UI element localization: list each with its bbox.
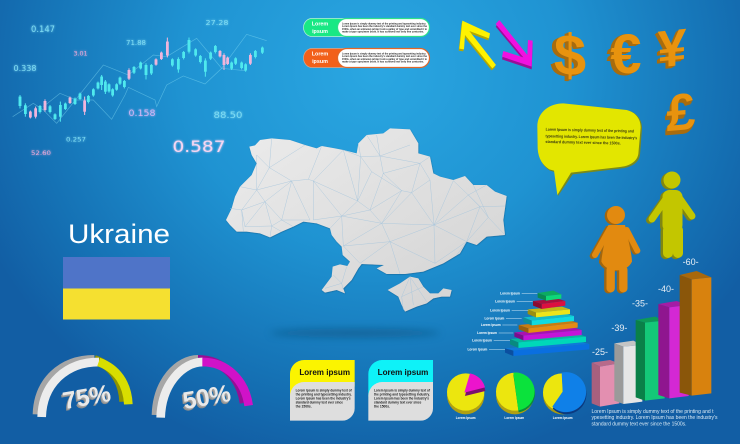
green pill: make a type specimen book. It has survived not only five centuries.: [342, 30, 424, 34]
bar chart caption: standard dummy text ever since the 1500s.: [592, 422, 686, 428]
value 0.147: 0.147: [31, 25, 55, 35]
pyramid chart: [468, 291, 589, 356]
bar value labels: -39-: [611, 323, 627, 333]
value 27.28: 27.28: [206, 19, 228, 27]
orange pill: 1500s, when an unknown printer took a galley of type and scrambled it to: [342, 57, 427, 61]
value 0.158: 0.158: [128, 109, 156, 119]
map shadow: [270, 328, 440, 338]
green pill: Lorem Ipsum is simply dummy text of the printing and typesetting industry.: [342, 22, 426, 26]
gauge 50 percent: [156, 359, 249, 418]
speech bubble: [537, 103, 642, 196]
pink candles: [30, 38, 250, 118]
gauge value 75%: 75%: [61, 380, 113, 415]
value 88.50: 88.50: [214, 111, 242, 121]
pyramid labels: Lorem Ipsum: [490, 308, 510, 312]
text card: yellow: Lorem Ipsum has been the industry's: [296, 397, 351, 401]
pyramid labels: Lorem Ipsum: [500, 291, 520, 295]
bubble text: typesetting industry. Lorem Ipsum has been the industry's: [545, 133, 638, 140]
pyramid labels: Lorem Ipsum: [495, 300, 515, 304]
orange pill: Lorem Ipsum has been the industry's standard dummy text ever since the: [342, 54, 427, 58]
bubble face: [537, 103, 641, 195]
map landmass: [226, 128, 507, 312]
pie 1: Lorem Ipsum: [456, 416, 476, 420]
cyan candles: [20, 38, 262, 122]
gauge value 50%: 50%: [181, 380, 233, 415]
map triangulation mesh: [230, 135, 505, 310]
bar chart caption: Lorem Ipsum is simply dummy text of the printing and t: [592, 409, 714, 415]
text card: cyan: Lorem Ipsum is simply dummy text of: [374, 389, 431, 393]
orange pill: ipsum: [312, 59, 328, 65]
orange pill: Lorem Ipsum is simply dummy text of the printing and typesetting industry.: [342, 52, 426, 56]
pyramid layer: yellow: [528, 307, 570, 317]
arrows: [459, 20, 533, 70]
orange pill: [304, 48, 430, 68]
icon: euro sign: €: [610, 22, 642, 85]
pyramid labels: [468, 291, 537, 351]
bar 35: [636, 317, 665, 401]
pyramid layer: teal: [510, 334, 586, 348]
bar value labels: -35-: [632, 299, 648, 309]
bar chart caption: ypesetting industry. Lorem Ipsum has been the industry's: [592, 415, 718, 421]
value 0.338: 0.338: [14, 64, 37, 73]
pie 2: Lorem Ipsum: [504, 416, 524, 420]
pyramid labels: Lorem Ipsum: [472, 339, 492, 343]
value 0.587: 0.587: [172, 137, 226, 156]
magenta arrow: [496, 20, 533, 69]
pyramid labels: Lorem Ipsum: [481, 323, 501, 327]
green pill: 1500s, when an unknown printer took a galley of type and scrambled it to: [342, 27, 427, 31]
bar 40: [658, 301, 689, 398]
bar value labels: -60-: [683, 257, 699, 267]
value 71.88: 71.88: [126, 39, 146, 47]
icon: dollar sign: $: [554, 22, 586, 89]
pyramid layer: cyan: [523, 314, 574, 325]
icon: pound sign: £: [667, 83, 695, 143]
bubble shadow: [539, 104, 642, 196]
text card: yellow: Lorem ipsum: [299, 368, 350, 377]
gauge 75 percent: [37, 359, 128, 417]
text card: yellow: standard dummy text ever since: [296, 401, 343, 405]
text card: yellow: Lorem Ipsum is simply dummy text of: [296, 389, 353, 393]
text card: yellow: [290, 360, 355, 421]
pyramid layer: orange: [519, 320, 578, 333]
map of Ukraine: [226, 128, 507, 312]
value 52.60: 52.60: [31, 149, 51, 157]
bar 25: [592, 360, 619, 407]
text card: cyan: the 1500s.: [374, 405, 390, 409]
text card: cyan: the printing and typesetting industry.: [374, 393, 430, 397]
pyramid labels: Lorem Ipsum: [468, 347, 488, 351]
text card: yellow: the printing and typesetting industry.: [296, 393, 352, 397]
bar chart caption: [592, 409, 718, 428]
legend pills: [304, 18, 430, 68]
pyramid layer: blue: [505, 342, 589, 356]
flag: [63, 257, 170, 320]
bar value labels: [592, 257, 699, 357]
pyramid labels: Lorem Ipsum: [485, 316, 505, 320]
green pill: Lorem: [312, 22, 328, 28]
chart trend lines: [13, 34, 267, 123]
pyramid layer: red: [533, 299, 565, 309]
pie charts: [447, 372, 586, 420]
bar value labels: -25-: [592, 347, 608, 357]
chart numbers: [14, 19, 242, 157]
candlestick chart: [13, 34, 267, 123]
text card: cyan: Lorem ipsum: [378, 368, 428, 377]
person: man: [650, 172, 692, 254]
green pill: ipsum: [312, 29, 328, 35]
person: woman: [593, 206, 637, 289]
3D bar chart: [592, 257, 711, 407]
text card: cyan: [368, 360, 433, 421]
pyramid labels: Lorem Ipsum: [477, 331, 497, 335]
text card: yellow: the 1500s.: [296, 405, 312, 409]
green pill: [304, 18, 430, 36]
text card: cyan: standard dummy text ever since: [374, 401, 422, 405]
green pill: Lorem Ipsum has been the industry's standard dummy text ever since the: [342, 24, 427, 28]
bubble text: Lorem Ipsum is simply dummy text of the printing and: [546, 127, 635, 134]
pie 3: Lorem Ipsum: [553, 416, 573, 420]
value 3.01: 3.01: [74, 50, 88, 58]
orange pill: make a type specimen book. It has survived not only five centuries.: [342, 60, 424, 64]
pyramid layer: magenta: [514, 327, 582, 340]
bubble text: [545, 127, 638, 146]
bar 39: [614, 341, 642, 404]
icon: yen sign: ¥: [658, 18, 686, 80]
text card: cyan: Lorem Ipsum has been the industry's: [374, 397, 429, 401]
pyramid layer: green: [538, 291, 561, 301]
bar 60: [680, 271, 711, 396]
bar value labels: -40-: [658, 284, 674, 294]
orange pill: Lorem: [312, 52, 328, 58]
value 0.257: 0.257: [66, 136, 86, 144]
title: Ukraine: [68, 219, 170, 249]
yellow arrow: [459, 21, 496, 70]
bubble text: standard dummy text ever since the 1500s.: [545, 139, 621, 146]
